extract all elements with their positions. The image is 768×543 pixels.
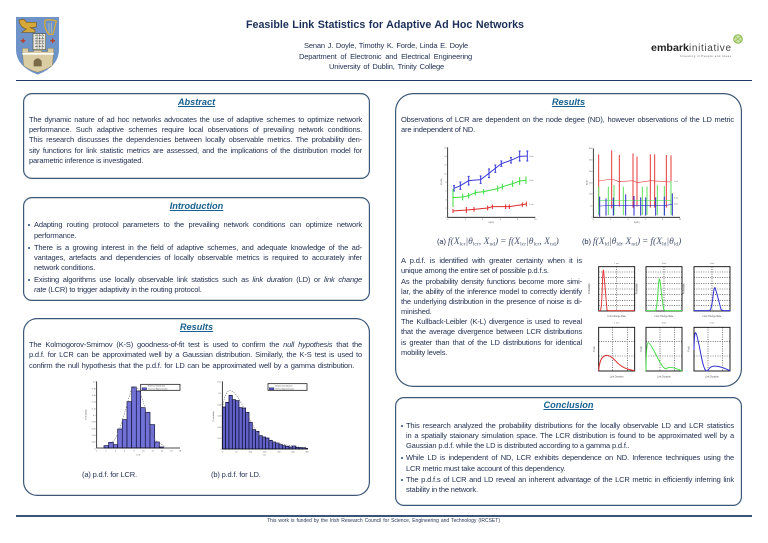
chart: LD histogram: 0.1 bbox=[219, 393, 222, 395]
text block: p.d.f. identification: The Kullback-Leibler (K-L) divergence is used to reveal bbox=[401, 317, 582, 326]
chart: E[LD] vs ND: 200 bbox=[589, 171, 593, 173]
bullet list: introduction bbox=[28, 220, 362, 294]
chart: LCR histogram: 4 bbox=[115, 451, 117, 453]
bullet list: conclusion: LCR metric must take account of this dependency. bbox=[406, 464, 565, 473]
chart: E[LD] vs ND: 6 bbox=[645, 219, 647, 221]
text block: node degree observation: Observations of LCR are dependent on the node degee (ND), however observations of the LD metric bbox=[401, 115, 734, 124]
chart: E[LCR] vs ND: 8 bbox=[445, 182, 447, 184]
plot: LD 5 m/s: 5 m/s bbox=[709, 323, 714, 325]
chart: E[LD] vs ND: 10 bbox=[679, 219, 682, 221]
chart: E[LCR] vs ND: 5 m/s bbox=[529, 156, 533, 158]
text block: abstract body: performance. Such adaptive schemes require local observations of prevailing network conditions. bbox=[29, 125, 362, 134]
heading: results: Results bbox=[180, 322, 213, 332]
chart: LCR histogram: 6 bbox=[124, 451, 126, 453]
chart: LD histogram: Empirical Distribution bbox=[276, 385, 293, 388]
crest: Trinity College shield bbox=[16, 17, 59, 75]
chart: E[LCR] vs ND: 16 bbox=[444, 147, 447, 149]
plot: LD 5 m/s: Prob. bbox=[687, 346, 690, 351]
chart: LD histogram: 250 bbox=[292, 452, 296, 454]
logo: embark initiative: embark bbox=[651, 43, 689, 54]
chart: LCR histogram: Gaussian Approximation bbox=[148, 388, 168, 391]
chart: E[LD] vs ND: 8 bbox=[662, 219, 664, 221]
chart: E[LD] vs ND: 150 bbox=[589, 182, 593, 184]
heading: conclusion: Conclusion bbox=[543, 400, 594, 410]
title: Feasible Link Statistics for Adaptive Ad Hoc Networks bbox=[246, 19, 524, 31]
chart: E[LCR] vs ND: 8 bbox=[517, 219, 519, 221]
logo: embark initiative: initiative bbox=[689, 43, 731, 54]
chart: LD histogram: 50 bbox=[236, 452, 239, 454]
heading: results: Results bbox=[552, 96, 585, 106]
chart: LCR histogram: 12 bbox=[152, 451, 154, 453]
chart: LD histogram: 0 bbox=[221, 449, 223, 451]
chart group: small p.d.f. plots bbox=[588, 262, 730, 378]
text block: K-S test: confirm the null hypothesis that the p.d.f. for LD can be approximated well by a gamma distribution. bbox=[29, 361, 354, 370]
heading: introduction: Introduction bbox=[170, 200, 223, 210]
plot: LD 5 m/s bbox=[687, 323, 730, 378]
text block: abstract body: parametric inference is investigated. bbox=[29, 156, 143, 164]
chart: E[LCR] vs ND: 10 bbox=[444, 173, 447, 175]
text block: p.d.f. identification bbox=[401, 256, 582, 357]
plot: LD 3 m/s: Link Duration bbox=[657, 375, 671, 378]
chart: E[LD] vs ND: 4 bbox=[627, 219, 629, 221]
chart: LCR histogram: 0.14 bbox=[92, 402, 97, 404]
bullet list: introduction: Existing algorithms use locally observable link statistics such as link duration (LD) or link change bbox=[34, 275, 362, 284]
bullet list: conclusion: This research analyzed the probability distributions for the locally observable LD and LCR statistics bbox=[406, 421, 734, 430]
text block: abstract body: sity functions for link statistic metrics are assessed, and the implications of the distribution model for bbox=[29, 146, 362, 154]
caption: LD independence formula: (b) f(Xld|θld, Xnd) = f(Xld|θld) bbox=[582, 236, 681, 248]
bullet list: conclusion: While LD is independent of ND, LCR exhibits dependence on ND. Inference techniques using the bbox=[406, 453, 734, 462]
panel: results right bbox=[395, 93, 742, 387]
chart: E[LCR] vs ND: 6 bbox=[499, 219, 501, 221]
text block: p.d.f. identification: is greater than that of the LD distributions for identical bbox=[401, 338, 582, 347]
chart: LCR histogram: Probability bbox=[84, 409, 87, 420]
text block: p.d.f. identification: the underlying distribution in the presence of noise is di- bbox=[401, 297, 582, 306]
chart: LD histogram: Gamma Approximation bbox=[276, 388, 294, 391]
chart: LD histogram bbox=[212, 381, 310, 457]
plot: LD 3 m/s bbox=[640, 323, 682, 378]
panel: conclusion bbox=[395, 397, 742, 506]
bullet list: introduction: performance. bbox=[34, 231, 76, 240]
plot: LCR 1 m/s: Probability bbox=[588, 282, 591, 294]
chart: LCR histogram: 0 bbox=[96, 451, 98, 453]
chart: E[LD] vs ND: 5 m/s bbox=[674, 203, 678, 205]
bullet list: conclusion: The p.d.f.s of LCR and LD reveal an inherent advantage of the LCR metric in efficiently inferring link bbox=[406, 475, 734, 484]
chart: LD histogram: LD bbox=[264, 455, 267, 457]
chart: LCR histogram: 8 bbox=[133, 451, 135, 453]
plot: LD 3 m/s: 3 m/s bbox=[661, 323, 666, 325]
chart: LCR histogram: 14 bbox=[161, 451, 164, 453]
text block: K-S test: p.d.f. for LCR can be approximated well by a Gaussian distribution. Similarly, the K-S test is used to bbox=[29, 350, 362, 359]
chart: LCR histogram: 0.08 bbox=[92, 422, 97, 424]
plot: LCR 3 m/s bbox=[635, 263, 682, 318]
text block: p.d.f. identification: lar, the ability of the inference model to correctly identify bbox=[401, 287, 582, 296]
text block: K-S test bbox=[29, 340, 362, 370]
chart: LCR histogram: 0.18 bbox=[92, 389, 97, 391]
authors and affiliation: University of Dublin, Trinity College bbox=[329, 62, 444, 70]
plot: LCR 3 m/s: Probability bbox=[635, 282, 638, 294]
plot: LD 1 m/s: Prob. bbox=[593, 346, 596, 351]
text block: p.d.f. identification: minished. bbox=[401, 307, 432, 316]
chart: E[LCR] vs ND bbox=[440, 147, 537, 224]
chart: E[LCR] vs ND: 12 bbox=[444, 165, 447, 167]
text block: p.d.f. identification: A p.d.f. is identified with greater certainty when it is bbox=[401, 256, 582, 265]
chart: E[LCR] vs ND: 10 bbox=[534, 219, 537, 221]
chart: LCR histogram: 0.02 bbox=[92, 442, 96, 444]
chart: LD histogram: 150 bbox=[263, 452, 268, 454]
plot: LCR 5 m/s: Link Change Rate bbox=[702, 315, 722, 318]
logo: embark initiative bbox=[651, 34, 743, 58]
chart: E[LD] vs ND: 250 bbox=[589, 159, 593, 161]
bullet list: conclusion bbox=[401, 421, 734, 494]
chart: LD histogram: 200 bbox=[278, 452, 282, 454]
plot: LD 5 m/s: Link Duration bbox=[705, 375, 719, 378]
plot: LCR 5 m/s bbox=[682, 263, 730, 318]
chart: E[LCR] vs ND: 4 bbox=[445, 199, 447, 201]
chart: E[LD] vs ND: 300 bbox=[589, 148, 593, 150]
text block: abstract body: This research discusses the dependencies between locally observable metrics. The probability den- bbox=[29, 135, 362, 144]
chart: LCR histogram: 0.04 bbox=[92, 435, 97, 437]
chart: LCR histogram: 16 bbox=[170, 451, 173, 453]
panel: introduction bbox=[23, 197, 370, 301]
chart: E[LD] vs ND: 1 m/s bbox=[674, 181, 678, 183]
text block: abstract body bbox=[29, 115, 362, 164]
chart: LCR histogram bbox=[84, 381, 182, 457]
chart: E[LD] vs ND: 2 bbox=[610, 219, 612, 221]
plot: LCR 1 m/s bbox=[588, 263, 634, 318]
chart: LCR histogram: LCR bbox=[136, 455, 141, 457]
chart: LCR histogram: Empirical Distribution bbox=[148, 385, 165, 388]
plot: LD 1 m/s: 1 m/s bbox=[614, 323, 619, 325]
caption: LCR dependence formula: (a) f(Xlcr|θlcr, Xnd) = f(Xlcr|θlcr, Xnd) bbox=[437, 236, 559, 248]
chart: LCR histogram: 0.2 bbox=[93, 382, 96, 384]
chart: E[LD] vs ND: 50 bbox=[590, 205, 593, 207]
plot: LCR 1 m/s: Link Change Rate bbox=[607, 315, 626, 318]
chart: E[LCR] vs ND: 2 bbox=[445, 208, 447, 210]
chart: E[LD] vs ND: 3 m/s bbox=[674, 197, 678, 199]
heading: abstract: Abstract bbox=[178, 96, 215, 106]
chart: E[LD] vs ND: E[LD] bbox=[586, 180, 588, 185]
text block: node degree observation: are independent of ND. bbox=[401, 125, 475, 134]
chart: E[LCR] vs ND: 1 m/s bbox=[529, 204, 533, 206]
caption: p.d.f. for LD: (b) p.d.f. for LD. bbox=[211, 470, 261, 478]
chart: LD histogram: 0.04 bbox=[218, 427, 223, 429]
plot: LD 1 m/s: Link Duration bbox=[609, 375, 624, 378]
plot: LCR 1 m/s: 1 m/s bbox=[614, 263, 619, 265]
chart: E[LCR] vs ND: 3 m/s bbox=[529, 180, 533, 182]
plot: LCR 5 m/s: Probability bbox=[682, 282, 685, 294]
chart: E[LCR] vs ND: 6 bbox=[445, 191, 447, 193]
bullet list: conclusion: in a spatially staionary simulation space. The LCR distribution is found to be approximated well by a bbox=[406, 431, 734, 440]
chart: LD histogram: 0.02 bbox=[218, 438, 222, 440]
text block: p.d.f. identification: mobility levels. bbox=[401, 348, 447, 357]
chart: E[LD] vs ND: 0 bbox=[591, 217, 593, 219]
chart: LD histogram: 0.08 bbox=[218, 405, 223, 407]
chart: LCR histogram: 0 bbox=[95, 449, 97, 451]
plot: LCR 3 m/s: 3 m/s bbox=[661, 263, 666, 265]
chart: LD histogram: 0.06 bbox=[218, 416, 223, 418]
chart: E[LD] vs ND bbox=[586, 148, 682, 224]
chart: LCR histogram: 0.16 bbox=[92, 395, 97, 397]
chart: LCR histogram: 0.1 bbox=[93, 415, 96, 417]
chart: E[LCR] vs ND: E[ND] bbox=[488, 222, 494, 224]
text block: p.d.f. identification: that the average divergence between LCR distributions bbox=[401, 327, 582, 336]
chart: E[LCR] vs ND: 0 bbox=[447, 219, 449, 221]
chart: E[LCR] vs ND: 14 bbox=[444, 156, 447, 158]
chart: E[LCR] vs ND: 2 bbox=[464, 219, 466, 221]
chart: LD histogram: 300 bbox=[306, 452, 310, 454]
text block: p.d.f. identification: As the probability density functions become more simi- bbox=[401, 277, 582, 286]
bullet list: introduction: rate (LCR) to trigger adaptivity in the routing protocol. bbox=[34, 285, 202, 294]
bullet list: conclusion: stability in the network. bbox=[406, 485, 478, 494]
footer: funding acknowledgement: This work is funded by the Irish Research Council for Science, Engineering and Technology (IRCSET) bbox=[267, 518, 500, 524]
chart: LCR histogram: 18 bbox=[179, 451, 182, 453]
chart: LCR histogram: 2 bbox=[105, 451, 107, 453]
chart: LD histogram: Probability bbox=[212, 411, 215, 422]
chart: E[LCR] vs ND: 0 bbox=[445, 217, 447, 219]
chart: LCR histogram: 10 bbox=[142, 451, 145, 453]
authors and affiliation: Department of Electronic and Electrical Engineering bbox=[299, 52, 472, 61]
chart: E[LD] vs ND: E[ND] bbox=[634, 222, 640, 224]
chart: LCR histogram: 0.12 bbox=[92, 409, 96, 411]
chart: E[LCR] vs ND: 4 bbox=[482, 219, 484, 221]
chart: LD histogram: 100 bbox=[249, 452, 253, 454]
caption: p.d.f. for LCR: (a) p.d.f. for LCR. bbox=[82, 470, 137, 478]
chart: LD histogram: 0 bbox=[222, 452, 224, 454]
bullet list: introduction: There is a growing interest in the field of adaptive schemes, and adequate knowledge of the ad- bbox=[34, 243, 362, 252]
panel: abstract bbox=[23, 93, 370, 179]
authors and affiliation bbox=[299, 41, 472, 70]
bullet list: introduction: Adapting routing protocol parameters to the prevailing network conditions can optimize network bbox=[34, 220, 362, 229]
chart: LCR histogram: 0.06 bbox=[92, 429, 97, 431]
bullet list: introduction: vantages, artefacts and dependencies of locally observable metrics is required to accurately infer bbox=[34, 253, 362, 262]
plot: LCR 3 m/s: Link Change Rate bbox=[654, 315, 674, 318]
chart: E[LD] vs ND: 0 bbox=[593, 219, 595, 221]
logo: embark initiative: Investing in People and Ideas bbox=[680, 54, 732, 58]
plot: LD 1 m/s bbox=[593, 323, 634, 378]
authors and affiliation: Senan J. Doyle, Timothy K. Forde, Linda E. Doyle bbox=[304, 41, 468, 50]
plot: LCR 5 m/s: 5 m/s bbox=[709, 263, 714, 265]
chart: E[LCR] vs ND: E[LCR] bbox=[441, 178, 443, 185]
panel: results left bbox=[23, 318, 370, 496]
text block: K-S test: The Kolmogorov-Smirnov (K-S) goodness-of-fit test is used to confirm the null hypothesis that the bbox=[29, 340, 362, 349]
text block: node degree observation bbox=[401, 115, 734, 134]
chart: LD histogram: 0.12 bbox=[218, 382, 222, 384]
bullet list: conclusion: Gaussian p.d.f. while the LD is distributed according to a gamma p.d.f.. bbox=[406, 441, 630, 450]
chart: E[LD] vs ND: 100 bbox=[589, 194, 593, 196]
bullet list: introduction: network conditions. bbox=[34, 263, 95, 272]
plot: LD 3 m/s: Prob. bbox=[640, 346, 643, 351]
text block: abstract body: The dynamic nature of ad hoc networks advocates the use of adaptive schemes to optimize network bbox=[29, 115, 362, 124]
text block: p.d.f. identification: unique among the entire set of possible p.d.f.s. bbox=[401, 266, 549, 275]
